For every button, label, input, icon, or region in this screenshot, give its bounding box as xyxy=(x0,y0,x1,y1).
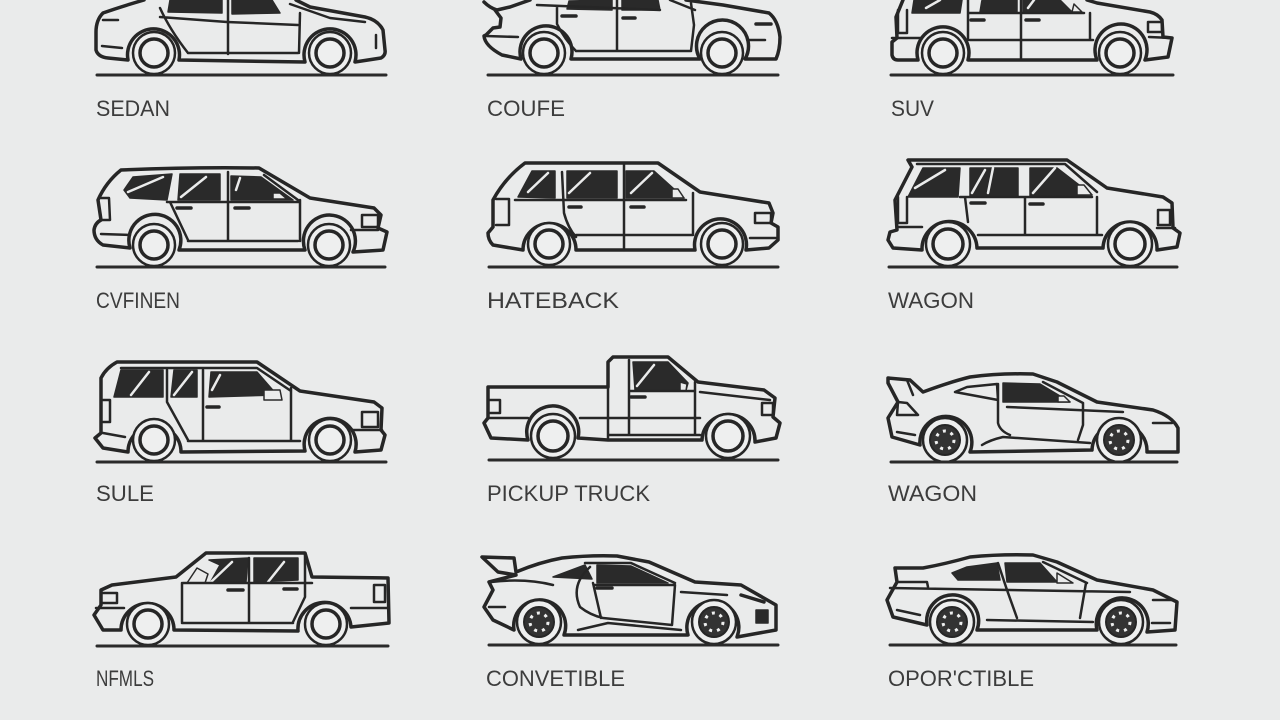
vehicle: sports car with spoiler xyxy=(482,556,778,645)
vehicle: sports coupe xyxy=(887,555,1177,645)
label: pickup truck (row 4): NFMLS xyxy=(96,666,154,691)
vehicle: SUV (row 3) xyxy=(95,362,386,462)
label: pickup truck: PICKUP TRUCK xyxy=(487,481,650,506)
vehicle: sedan xyxy=(96,0,386,75)
label: SUV (row 3): SULE xyxy=(96,481,154,506)
vehicle: hatchback xyxy=(488,163,778,267)
label: coupe: COUFE xyxy=(487,96,565,121)
vehicle: coupe xyxy=(484,0,780,75)
label: wagon (row 2): WAGON xyxy=(888,288,974,313)
label: minivan: CVFINEN xyxy=(96,288,180,313)
label: SUV: SUV xyxy=(891,96,934,121)
label: sedan: SEDAN xyxy=(96,96,170,121)
vehicle: pickup truck (row 4) xyxy=(94,553,389,646)
vehicle: wagon (row 2) xyxy=(888,160,1180,267)
label: wagon (row 3): WAGON xyxy=(888,481,977,506)
label: convertible: CONVETIBLE xyxy=(486,666,625,691)
vehicle: minivan xyxy=(94,168,387,267)
label: hatchback: HATEBACK xyxy=(487,288,619,313)
vehicle: pickup truck xyxy=(484,357,780,460)
label: sports coupe: OPOR'CTIBLE xyxy=(888,666,1034,691)
vehicle: sports car (row 3) xyxy=(888,374,1178,462)
vehicle: SUV xyxy=(891,0,1173,75)
